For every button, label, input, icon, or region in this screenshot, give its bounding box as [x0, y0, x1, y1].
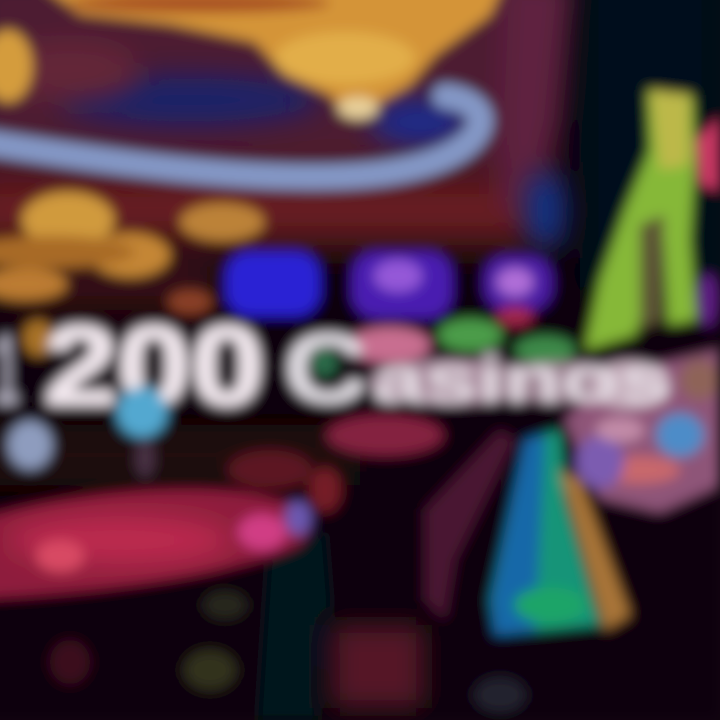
blue-grey neon ring: [0, 96, 481, 177]
title text: C: [284, 313, 368, 423]
pink roulette table: [0, 490, 311, 598]
ceiling: blue glow and red curtains: [0, 0, 572, 250]
teal carpet stripe: [490, 430, 630, 635]
gold ceiling ornament: [0, 0, 505, 119]
green neon figure: [585, 90, 720, 350]
dark figure: [258, 530, 332, 720]
colourful wheel: [565, 350, 720, 512]
title text: [0, 303, 672, 428]
title text: asinos: [372, 342, 672, 416]
floor and slot machine lights: [50, 430, 526, 713]
title text: 200: [44, 303, 264, 428]
lower left lights: [8, 387, 443, 512]
gold ceiling lamps left: [0, 192, 264, 356]
green and pink glow behind title: [350, 319, 630, 404]
row of glowing screens: [226, 252, 552, 326]
